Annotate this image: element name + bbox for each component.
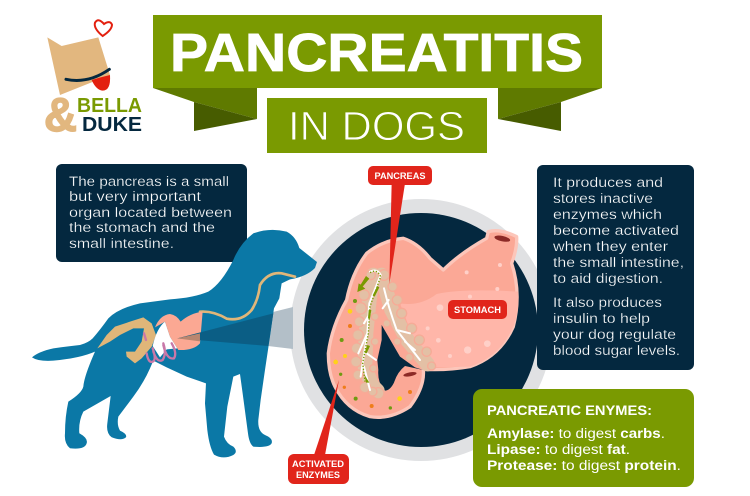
zoom beam: dark: [177, 313, 273, 346]
illustration: stomach and pancreas: [314, 183, 518, 455]
pointer: activated enzymes: [314, 380, 339, 455]
panel: pancreatic enzymes: PANCREATIC ENYMES:: [487, 403, 652, 418]
pancreatic ducts: [358, 271, 420, 390]
text panel: enzyme and insulin production: stores inactive: [553, 191, 653, 206]
text panel: enzyme and insulin production: blood sugar levels.: [553, 343, 680, 358]
magnifier ring: [290, 199, 552, 461]
ribbon fold: left: [153, 88, 257, 131]
stomach and duodenum: [328, 231, 517, 417]
label: activated enzymes: ENZYMES: [296, 470, 340, 480]
text panel: enzyme and insulin production: when they enter: [552, 239, 669, 254]
label: pancreas: [368, 166, 432, 185]
text panel: pancreas description: small intestine.: [69, 236, 174, 251]
panel: pancreatic enzymes: Amylase: to digest carbs .: [487, 426, 665, 441]
text panel: enzyme and insulin production: to aid digestion.: [553, 271, 663, 286]
magnifier circle: [304, 213, 538, 447]
title panel: [153, 15, 602, 88]
pancreas: [153, 322, 177, 357]
large intestine: [97, 317, 156, 363]
panel: pancreatic enzymes: Lipase: to digest fat.: [487, 442, 630, 457]
title: PANCREATITIS: [170, 23, 583, 83]
brand name: Duke: DUKE: [82, 113, 142, 136]
text panel: enzyme and insulin production: the small intestine,: [553, 255, 684, 270]
text panel: enzyme and insulin production: become activated: [553, 223, 679, 238]
esophagus: [200, 273, 295, 319]
text panel: enzyme and insulin production: insulin to help: [553, 311, 650, 326]
zoom beam: tip: [177, 333, 200, 341]
pointer: pancreas: [389, 183, 405, 284]
ampersand: &: [44, 88, 77, 141]
label: activated enzymes: [288, 454, 349, 484]
brand name: Bella: BELLA: [77, 94, 142, 117]
text panel: pancreas description: The pancreas is a small: [69, 174, 229, 189]
stomach highlights: [426, 263, 502, 358]
text panel: pancreas description: but very important: [69, 189, 201, 204]
icon: dog head: [47, 20, 112, 95]
panel: pancreatic enzymes: [473, 389, 694, 487]
logo: Bella & Duke: [44, 20, 142, 141]
enzyme dots: [333, 299, 412, 410]
arrow: enzymes flow: [357, 276, 379, 383]
subtitle panel: [267, 98, 487, 153]
stomach lower shade: [400, 290, 518, 367]
panel: pancreatic enzymes: Protease: to digest protein .: [487, 458, 681, 473]
text panel: enzyme and insulin production: It also produces: [553, 295, 662, 310]
label: stomach: [448, 300, 507, 319]
subtitle: IN DOGS: [288, 103, 465, 149]
text panel: enzyme and insulin production: [537, 165, 694, 370]
label: pancreas: PANCREAS: [374, 171, 426, 181]
dog silhouette: [32, 230, 317, 457]
pancreas lobes: [351, 270, 436, 399]
title banner: [153, 15, 602, 153]
text panel: pancreas description: the stomach and the: [69, 220, 215, 235]
text panel: pancreas description: [56, 164, 247, 262]
label: activated enzymes: ACTIVATED: [292, 459, 345, 469]
enzyme path: green dotted: [363, 271, 381, 382]
stomach: [155, 312, 203, 350]
zoom beam: light: [268, 307, 293, 349]
text panel: enzyme and insulin production: enzymes which: [553, 207, 662, 222]
small intestine: [144, 333, 175, 362]
label: stomach: STOMACH: [454, 305, 501, 315]
text panel: pancreas description: organ located between: [69, 205, 232, 220]
text panel: enzyme and insulin production: It produces and: [553, 175, 663, 190]
ribbon fold: right: [498, 88, 602, 131]
text panel: enzyme and insulin production: your dog regulate: [553, 327, 676, 342]
stomach opening: [494, 234, 511, 243]
gap between pancreas arms: [377, 325, 423, 391]
illustration: dog with digestive system: [32, 230, 317, 457]
duodenum opening: [403, 371, 417, 377]
